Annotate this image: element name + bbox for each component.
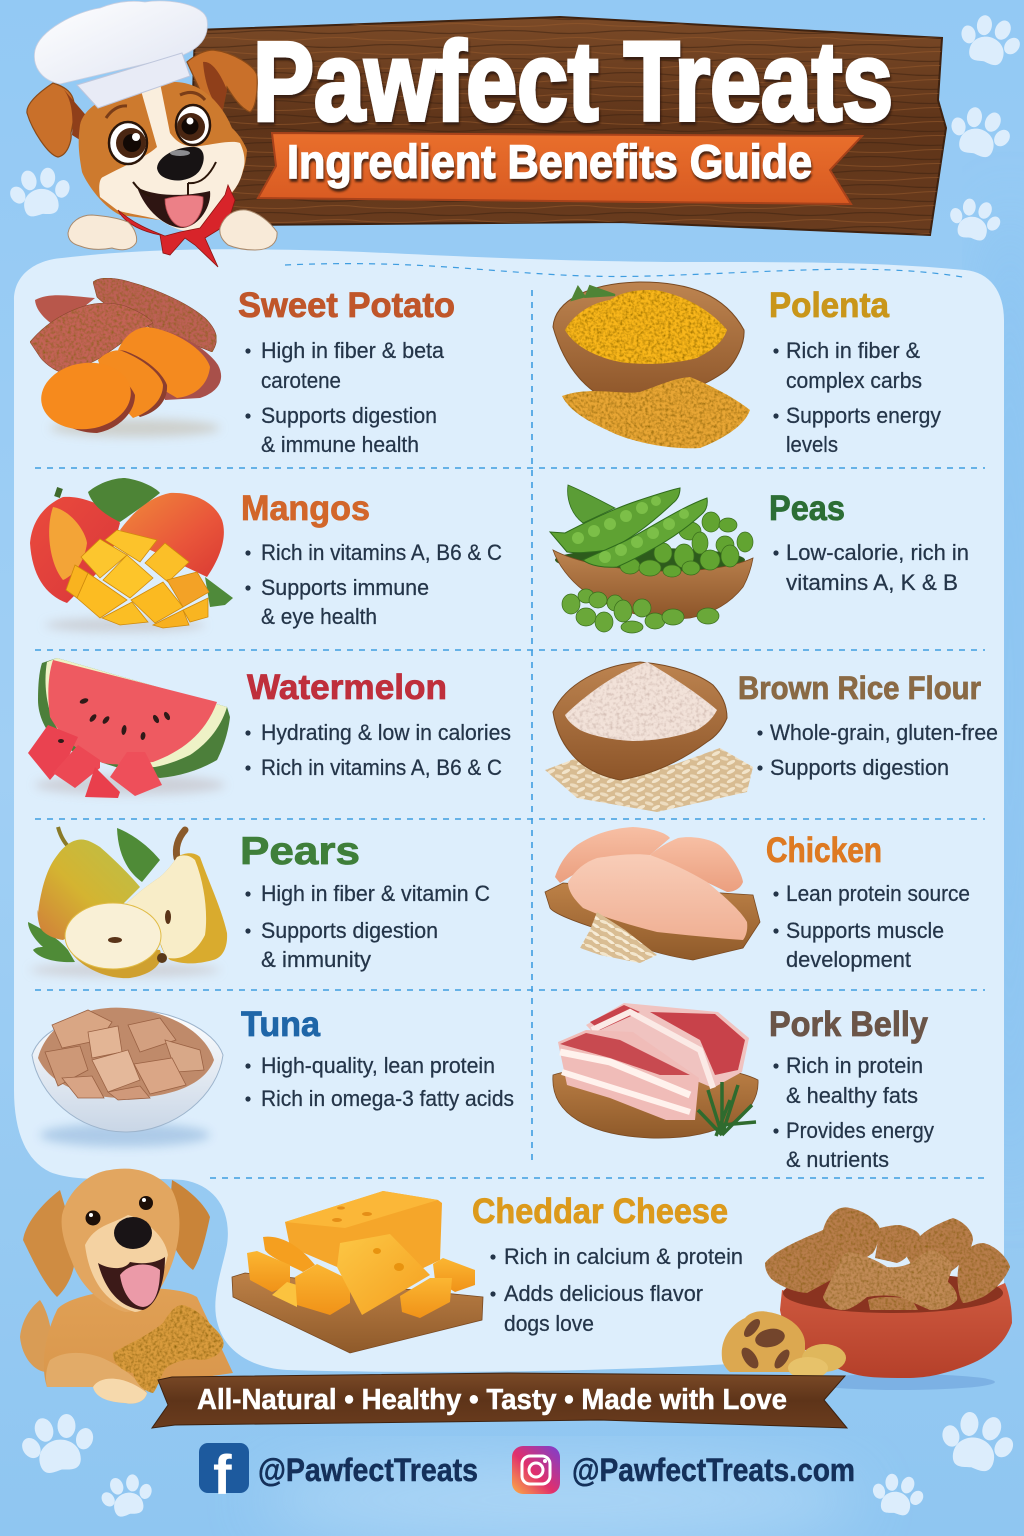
benefit list <box>245 1053 514 1111</box>
benefit list: Lean protein source <box>786 881 970 906</box>
heading: Peas <box>769 489 845 528</box>
benefit list: Supports muscle <box>786 918 944 943</box>
heading: Chicken <box>766 831 882 870</box>
icon: tuna bowl <box>32 1008 223 1147</box>
heading: Pears <box>240 830 360 873</box>
benefit list: Rich in fiber & <box>786 338 920 363</box>
subtitle ribbon: Ingredient Benefits Guide <box>287 135 812 188</box>
benefit list <box>757 720 998 780</box>
benefit list: High in fiber & beta <box>261 338 445 363</box>
heading: Polenta <box>769 286 889 325</box>
header wood plank <box>190 17 946 235</box>
heading: Brown Rice Flour <box>738 670 981 706</box>
benefit list: Rich in vitamins A, B6 & C <box>261 755 502 780</box>
bottom wood banner: All-Natural • Healthy • Tasty • Made with Love <box>197 1384 787 1416</box>
benefit list: & healthy fats <box>786 1083 918 1108</box>
icon: pork belly <box>553 1003 758 1138</box>
icon: flour bowl <box>545 662 753 812</box>
icon: chicken on board <box>545 827 760 963</box>
heading: Pork Belly <box>769 1005 928 1044</box>
panel: pork belly <box>553 1003 934 1172</box>
panel: pears <box>28 827 490 978</box>
benefit list: & immunity <box>261 947 371 972</box>
panel: mangos <box>30 478 502 632</box>
benefit list <box>773 338 941 457</box>
benefit list: Supports digestion <box>261 918 438 943</box>
benefit list: Adds delicious flavor <box>504 1281 703 1306</box>
benefit list: Provides energy <box>786 1118 934 1143</box>
benefit list: Whole-grain, gluten-free <box>770 720 998 745</box>
benefit list <box>773 1053 934 1172</box>
benefit list: dogs love <box>504 1311 594 1336</box>
benefit list <box>245 881 490 972</box>
icon: chef dog mascot <box>27 1 277 267</box>
social: facebook: f <box>213 1443 232 1506</box>
benefit list: Supports immune <box>261 575 429 600</box>
benefit list: Rich in vitamins A, B6 & C <box>261 540 502 565</box>
benefit list <box>245 720 511 780</box>
icon: watermelon <box>28 658 230 798</box>
benefit list: Supports digestion <box>770 755 949 780</box>
heading: Cheddar Cheese <box>472 1192 728 1231</box>
panel: tuna <box>32 1005 514 1147</box>
icon: golden retriever with biscuit <box>20 1169 233 1404</box>
benefit list: Supports digestion <box>261 403 437 428</box>
social: instagram <box>512 1446 855 1494</box>
benefit list: development <box>786 947 911 972</box>
heading: Watermelon <box>247 668 447 707</box>
panel: peas <box>550 485 969 633</box>
benefit list <box>773 540 969 595</box>
benefit list: Hydrating & low in calories <box>261 720 511 745</box>
icon: mangos <box>30 478 233 632</box>
benefit list: complex carbs <box>786 368 922 393</box>
benefit list: High-quality, lean protein <box>261 1053 495 1078</box>
icon: pears <box>28 827 227 978</box>
main content panel <box>14 249 1004 1372</box>
benefit list <box>773 881 970 972</box>
heading: Mangos <box>241 489 370 528</box>
benefit list: High in fiber & vitamin C <box>261 881 490 906</box>
bottom wood banner <box>152 1373 847 1428</box>
benefit list: & eye health <box>261 604 377 629</box>
section dividers <box>35 264 985 1178</box>
social: instagram: @PawfectTreats.com <box>572 1452 855 1488</box>
benefit list: vitamins A, K & B <box>786 570 958 595</box>
benefit list: & immune health <box>261 432 419 457</box>
benefit list: Rich in omega-3 fatty acids <box>261 1086 514 1111</box>
benefit list: Rich in protein <box>786 1053 923 1078</box>
benefit list <box>245 540 502 629</box>
benefit list: Low-calorie, rich in <box>786 540 969 565</box>
benefit list: & nutrients <box>786 1147 889 1172</box>
benefit list: Rich in calcium & protein <box>504 1244 743 1269</box>
benefit list: carotene <box>261 368 341 393</box>
social: facebook <box>199 1443 478 1506</box>
panel: watermelon <box>28 658 511 798</box>
benefit list: Supports energy <box>786 403 941 428</box>
panel: cheddar cheese <box>232 1191 743 1353</box>
panel: polenta <box>553 282 941 457</box>
heading: Sweet Potato <box>238 286 455 325</box>
social: facebook: @PawfectTreats <box>258 1452 478 1488</box>
icon: pea bowl <box>550 485 753 633</box>
panel: brown rice flour <box>545 662 998 812</box>
icon: bowl of dog biscuits <box>722 1207 1012 1390</box>
heading: Tuna <box>241 1005 321 1044</box>
icon: sweet potatoes <box>30 278 221 437</box>
benefit list <box>245 338 445 457</box>
icon: polenta bowl <box>553 282 750 448</box>
benefit list: levels <box>786 432 838 457</box>
benefit list <box>490 1244 743 1336</box>
panel: sweet potato <box>30 278 455 457</box>
icon: cheese on board <box>232 1191 483 1353</box>
title: Pawfect Treats <box>253 19 893 144</box>
panel: chicken <box>545 827 970 972</box>
